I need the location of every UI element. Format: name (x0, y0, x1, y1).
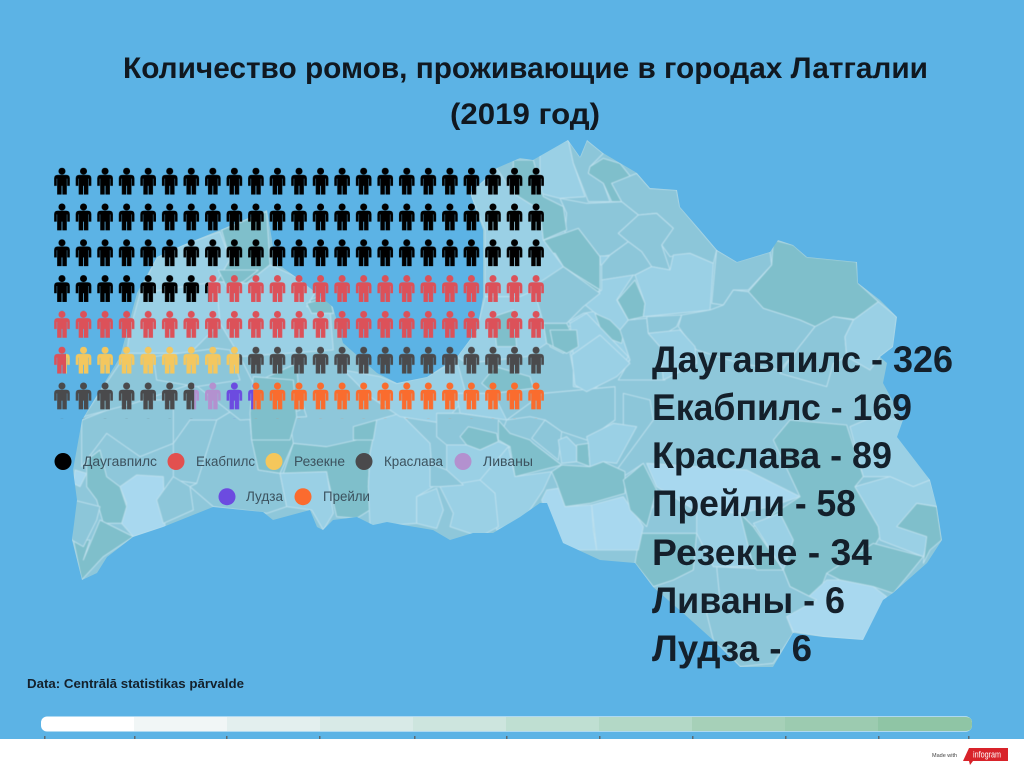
legend item: Резекне: Резекне (294, 454, 345, 469)
legend item: Краслава: Краслава (384, 454, 443, 469)
city totals list: Краслава - 89 (652, 435, 892, 476)
legend item: Лудза: Лудза (246, 489, 283, 504)
colour scale bar (41, 716, 972, 739)
city totals list: Даугавпилс - 326 (652, 339, 953, 380)
people: Ливаны (194, 382, 224, 418)
legend item: Ливаны (454, 453, 533, 470)
legend item: Резекне (266, 453, 345, 470)
city totals list: Ливаны - 6 (652, 580, 845, 621)
title: (2019 год) (450, 98, 600, 131)
infogram badge: infogram (973, 750, 1001, 760)
legend item: Ливаны: Ливаны (483, 454, 533, 469)
legend item: Краслава (356, 453, 443, 470)
people: Краслава (51, 347, 547, 418)
infogram badge (932, 748, 1008, 765)
city totals list: Лудза - 6 (652, 628, 812, 669)
map of Latvia regions (60, 130, 960, 680)
legend item: Даугавпилс: Даугавпилс (83, 454, 157, 469)
people: Даугавпилс (51, 168, 547, 311)
title (123, 52, 928, 131)
data source: Data: Centrālā statistikas pārvalde (27, 676, 244, 691)
city totals list: Резекне - 34 (652, 532, 872, 573)
footer bar (0, 739, 1024, 771)
title: Количество ромов, проживающие в городах Латгалии (123, 52, 928, 85)
city totals list: Екабпилс - 169 (652, 387, 912, 428)
city totals list (652, 339, 953, 669)
people: Прейли (253, 382, 547, 418)
legend item: Екабпилс: Екабпилс (196, 454, 255, 469)
people: Резекне (66, 347, 239, 382)
city totals list: Прейли - 58 (652, 483, 856, 524)
legend item: Прейли: Прейли (323, 489, 370, 504)
legend (54, 453, 533, 505)
infogram badge: Made with (932, 753, 957, 759)
legend item: Прейли (294, 488, 370, 505)
pictogram chart: people per city (51, 168, 547, 418)
people: Екабпилс (51, 275, 547, 382)
legend item: Даугавпилс (54, 453, 157, 470)
legend item: Екабпилс (168, 453, 255, 470)
people: Лудза (224, 382, 253, 418)
legend item: Лудза (218, 488, 283, 505)
